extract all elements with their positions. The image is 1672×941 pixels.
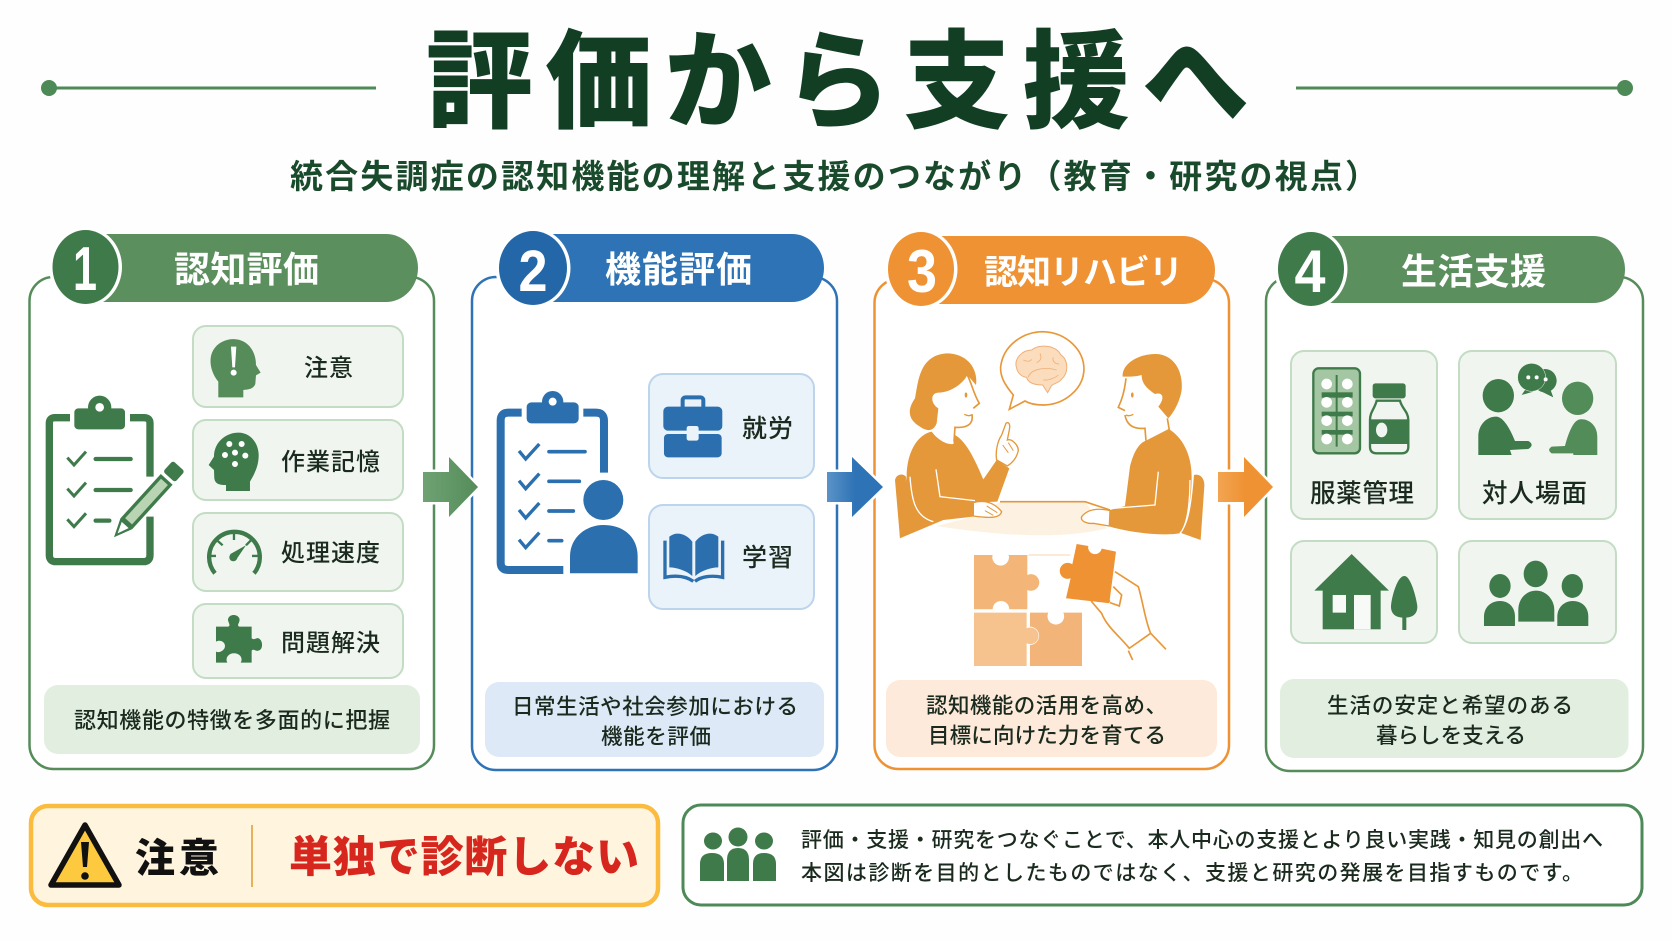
icon: clipboard with pencil [49,396,186,562]
panel header: 認知評価 [49,227,418,307]
subtitle: 統合失調症の認知機能の理解と支援のつながり（教育・研究の視点） [290,158,1378,195]
panel header: 認知リハビリ: 認知リハビリ [984,254,1183,292]
icon: head with dots [209,433,259,491]
item: 注意: 注意 [304,355,353,382]
item: group [1459,541,1616,643]
item: 就労: 就労 [742,415,793,443]
panel: 生活支援 [1266,229,1643,771]
arrow: step 1 to 2 [423,457,478,517]
icon: open book [665,534,723,581]
item: 対人場面 [1459,351,1616,519]
panel header: 認知評価: 1 [73,235,97,304]
icon: briefcase [663,397,722,457]
item: 注意 [193,326,403,407]
icon: house and tree [1314,554,1417,630]
item: 服薬管理: 服薬管理 [1310,480,1414,508]
summary: 生活支援: 暮らしを支える [1376,724,1526,748]
item: 作業記憶 [193,420,403,500]
icon: warning triangle [51,825,119,885]
person: woman [900,353,1018,538]
arrow: step 2 to 3 [827,457,883,517]
summary: 認知評価 [44,685,420,754]
icon: three people [1484,561,1588,626]
item: 問題解決 [193,604,403,678]
panel header: 機能評価: 機能評価 [605,249,752,290]
summary: 認知リハビリ: 目標に向けた力を育てる [928,724,1166,748]
summary: 認知評価: 認知機能の特徴を多面的に把握 [74,708,390,733]
panel: note: 評価・支援・研究をつなぐことで、本人中心の支援とより良い実践・知見の創出へ [801,829,1603,852]
summary: 生活支援: 生活の安定と希望のある [1327,694,1573,718]
item: house [1291,541,1437,643]
panel header: 生活支援 [1274,229,1625,309]
panel header: 機能評価 [496,228,824,308]
panel: 機能評価 [472,228,837,770]
callout: caution: 注意 [135,837,219,881]
icon: speedometer [208,532,260,573]
puzzle [974,544,1166,666]
panel header: 認知リハビリ [884,229,1215,309]
summary: 機能評価: 機能を評価 [601,725,711,749]
summary: 認知リハビリ: 認知機能の活用を高め、 [926,694,1167,718]
item: 学習 [649,505,814,609]
arrow: step 3 to 4 [1218,457,1273,517]
panel header: 機能評価: 2 [518,239,548,304]
item: 処理速度: 処理速度 [281,540,380,567]
item: 対人場面: 対人場面 [1482,480,1587,508]
icon: head with exclamation [211,339,261,397]
person: man [1081,354,1192,534]
summary: 生活支援 [1280,679,1628,758]
panel header: 生活支援: 4 [1294,238,1326,305]
summary: 機能評価: 日常生活や社会参加における [512,695,798,719]
item: 問題解決: 問題解決 [281,630,380,657]
speech bubble with brain [1001,332,1084,409]
callout: caution: 単独で診断しない [289,834,639,882]
icon: two people talking [1478,363,1597,455]
summary: 認知リハビリ [886,680,1217,757]
item: 服薬管理 [1291,351,1437,519]
chair: right [1180,475,1204,540]
item: 処理速度 [193,513,403,591]
item: 学習: 学習 [742,544,793,572]
title rule: left [41,80,376,96]
icon: people group [700,828,776,881]
panel: note: 本図は診断を目的としたものではなく、支援と研究の発展を目指すものです。 [801,862,1583,885]
chair: left [895,474,912,538]
panel: note [683,805,1642,905]
title: 評価から支援へ [426,22,1249,142]
panel: 認知リハビリ [874,229,1229,769]
icon: medicine [1313,368,1408,453]
summary: 機能評価 [485,682,824,757]
panel header: 認知リハビリ: 3 [907,238,937,305]
panel header: 認知評価: 認知評価 [174,249,319,290]
item: 作業記憶: 作業記憶 [281,449,380,476]
icon: puzzle piece [216,615,262,663]
title rule: right [1296,80,1633,96]
icon: checklist with person [501,391,638,573]
item: 就労 [649,374,814,478]
callout: caution [31,806,658,905]
illustration: conversation [895,332,1204,666]
table [937,502,1110,535]
panel: 認知評価 [30,227,434,769]
panel header: 生活支援: 生活支援 [1401,251,1546,292]
